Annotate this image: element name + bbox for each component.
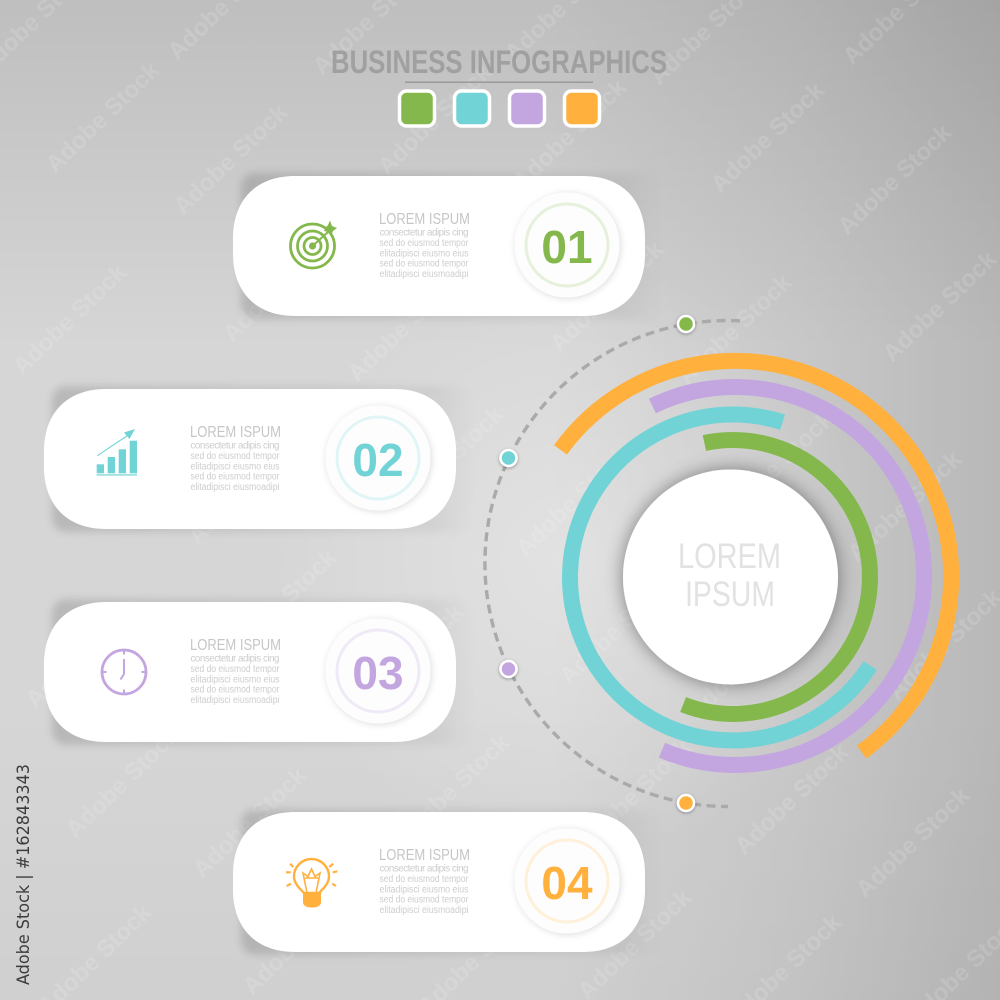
panel: card 02 <box>44 386 474 532</box>
node: teal <box>500 450 516 466</box>
watermark pattern: Adobe Stock <box>21 591 145 713</box>
text block <box>190 424 281 493</box>
text block: elitadipisci eiusmoadipi <box>380 905 468 916</box>
swatch: green <box>400 91 434 126</box>
text block: sed do eiusmod tempor <box>190 664 280 675</box>
watermark pattern: Adobe Stock <box>53 385 177 507</box>
node: green <box>678 316 694 332</box>
centre label: LOREM <box>678 537 781 576</box>
text block: sed do eiusmod tempor <box>380 874 469 885</box>
number badge 03: 03 <box>352 647 404 699</box>
text block: consectetur adipis cing <box>190 654 280 664</box>
watermark pattern: Adobe Stock <box>843 445 967 567</box>
watermark pattern: Adobe Stock <box>706 76 830 198</box>
text block: consectetur adipis cing <box>190 440 280 452</box>
text block: elitadipisci eiusmo eius <box>380 248 469 260</box>
text block: LOREM ISPUM <box>190 637 281 654</box>
number badge 04 <box>514 828 620 934</box>
panel: card 04 <box>233 809 663 955</box>
node: purple <box>500 661 516 677</box>
swatch: purple <box>510 91 544 126</box>
dashed connector arc <box>485 320 740 807</box>
text block: sed do eiusmod tempor <box>380 238 469 249</box>
icon: target <box>290 220 337 268</box>
stock id label: Adobe Stock | #162843343 <box>14 764 33 985</box>
text block: LOREM ISPUM <box>379 211 470 228</box>
number badge 04: 04 <box>541 857 593 909</box>
watermark pattern: Adobe Stock <box>343 265 467 387</box>
text block: sed do eiusmod tempor <box>190 472 280 482</box>
watermark pattern: Adobe Stock <box>385 400 509 522</box>
text block: elitadipisci eiusmoadipi <box>380 269 468 280</box>
watermark pattern: Adobe Stock <box>508 73 632 195</box>
watermark pattern: Adobe Stock <box>8 258 132 380</box>
text block <box>379 211 470 280</box>
watermark pattern: Adobe Stock <box>573 733 697 855</box>
text block: sed do eiusmod tempor <box>190 684 280 696</box>
text block: LOREM ISPUM <box>190 424 281 441</box>
watermark pattern: Adobe Stock <box>833 118 957 240</box>
icon: light bulb <box>286 859 337 908</box>
watermark pattern: Adobe Stock <box>188 761 312 883</box>
watermark pattern: Adobe Stock <box>391 728 515 850</box>
number badge 02: 02 <box>352 434 404 486</box>
watermark pattern: Adobe Stock <box>851 781 975 903</box>
ring: orange <box>560 361 951 752</box>
number badge 03 <box>326 618 430 724</box>
panel: card 03 <box>44 599 474 745</box>
icon: clock <box>102 650 146 694</box>
text block <box>190 637 281 706</box>
panel: card 01 <box>233 173 663 319</box>
centre label <box>678 537 781 614</box>
watermark pattern: Adobe Stock <box>545 235 669 357</box>
watermark pattern: Adobe Stock <box>169 98 293 220</box>
text block: elitadipisci eiusmo eius <box>190 674 280 686</box>
swatch: teal <box>454 91 490 126</box>
ring: green <box>683 440 870 714</box>
text block: elitadipisci eiusmo eius <box>380 884 469 896</box>
title underline <box>405 82 593 83</box>
number badge 02 <box>326 406 430 510</box>
text block: elitadipisci eiusmoadipi <box>190 695 280 706</box>
watermark pattern: Adobe Stock <box>715 405 839 527</box>
watermark pattern: Adobe Stock <box>373 58 497 180</box>
title: BUSINESS INFOGRAPHICS <box>331 44 667 80</box>
centre circle <box>623 470 838 684</box>
text block: sed do eiusmod tempor <box>380 258 469 270</box>
watermark pattern: Adobe Stock <box>218 225 342 347</box>
watermark pattern: Adobe Stock <box>683 603 807 725</box>
watermark pattern: Adobe Stock <box>730 738 854 860</box>
text block: elitadipisci eiusmo eius <box>190 462 280 472</box>
number badge 01: 01 <box>541 221 593 273</box>
text block: consectetur adipis cing <box>380 228 468 238</box>
watermark pattern: Adobe Stock <box>183 428 307 550</box>
text block: sed do eiusmod tempor <box>190 451 280 462</box>
ring: purple <box>652 387 924 765</box>
swatch: orange <box>564 91 600 126</box>
watermark pattern: Adobe Stock <box>673 268 797 390</box>
watermark pattern: Adobe Stock <box>218 543 342 665</box>
number badge 01 <box>514 192 620 298</box>
watermark pattern: Adobe Stock <box>555 568 679 690</box>
text block: sed do eiusmod tempor <box>380 894 469 906</box>
watermark pattern: Adobe Stock <box>41 56 165 178</box>
text block <box>379 847 470 916</box>
text block: elitadipisci eiusmoadipi <box>190 482 280 493</box>
watermark pattern: Adobe Stock <box>238 878 362 1000</box>
node: orange <box>678 795 694 811</box>
watermark pattern: Adobe Stock <box>511 440 635 562</box>
icon: bar chart with arrow <box>96 429 137 476</box>
watermark pattern: Adobe Stock <box>61 721 185 843</box>
text block: LOREM ISPUM <box>379 847 470 864</box>
text block: consectetur adipis cing <box>380 864 468 874</box>
ring: teal <box>570 414 870 740</box>
watermark pattern: Adobe Stock <box>878 245 1000 367</box>
watermark pattern: Adobe Stock <box>345 598 469 720</box>
centre label: IPSUM <box>685 575 775 614</box>
colour swatches <box>400 91 600 126</box>
